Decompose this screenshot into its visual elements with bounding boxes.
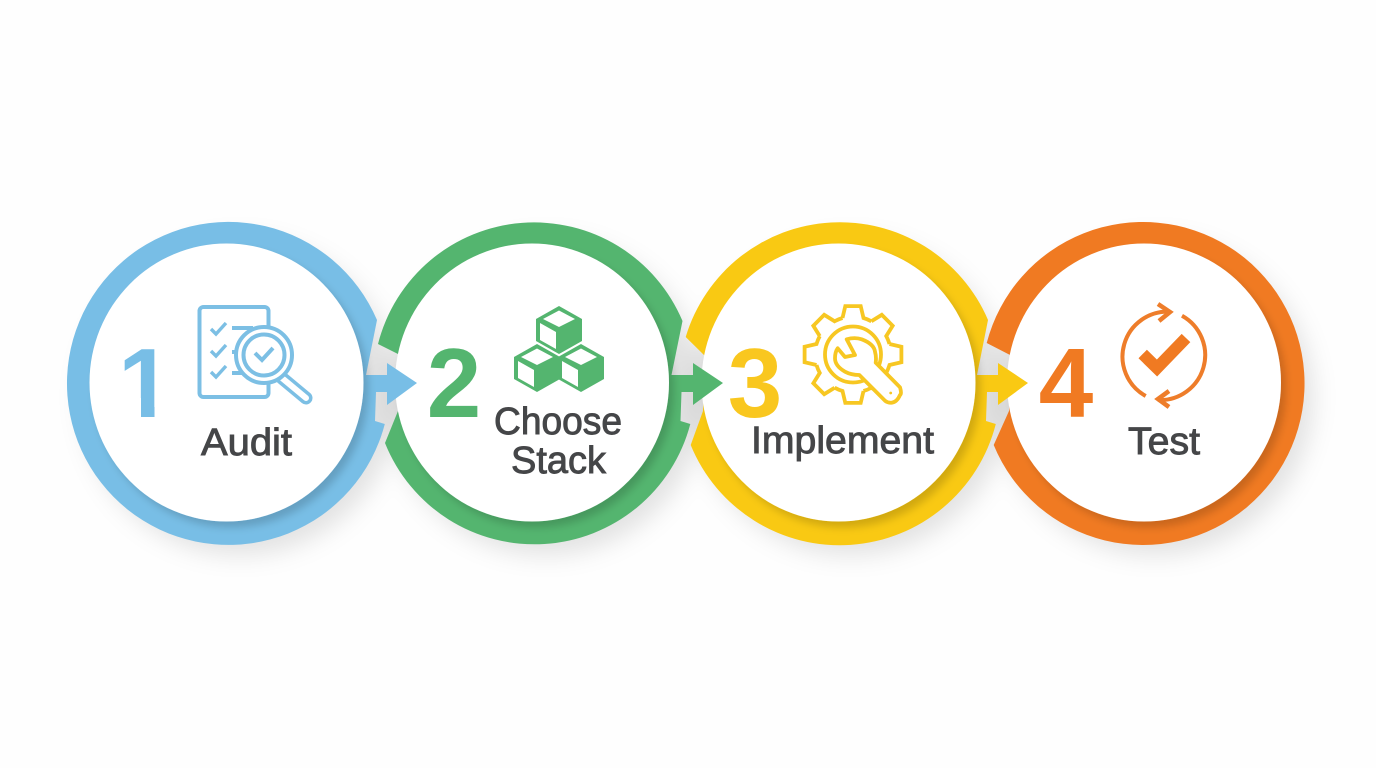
disc 2 xyxy=(395,244,669,522)
label: Choose Stack xyxy=(494,401,622,482)
number 2: 2 xyxy=(427,328,481,438)
ring and arrow 3 xyxy=(686,222,1028,545)
ring and arrow 1 xyxy=(67,222,417,545)
icon: stacked cubes xyxy=(514,306,604,392)
label: Choose Stack: Choose xyxy=(494,401,622,443)
label: Implement: Implement xyxy=(751,420,934,462)
step 3: implement xyxy=(686,222,1028,545)
label: Choose Stack: Stack xyxy=(511,440,607,482)
label: Test: Test xyxy=(1128,421,1200,463)
disc 3 xyxy=(702,244,976,522)
step 2: choose stack xyxy=(378,222,723,544)
number 3: 3 xyxy=(728,328,782,438)
disc 1 xyxy=(90,244,364,522)
disc 4 xyxy=(1007,244,1281,522)
icon: cycle with check xyxy=(1122,304,1205,407)
ring 4 xyxy=(987,222,1305,545)
step 1: audit xyxy=(67,222,417,545)
icon: gear with wrench xyxy=(805,306,901,403)
ring and arrow 2 xyxy=(378,222,723,544)
drop shadows xyxy=(82,239,1313,555)
number 4: 4 xyxy=(1039,328,1093,438)
number 1: 1 xyxy=(118,328,173,438)
step 4: test xyxy=(987,222,1305,545)
icon: checklist with magnifier xyxy=(200,307,306,398)
label: Audit: Audit xyxy=(201,422,292,464)
process diagram xyxy=(67,222,1319,560)
